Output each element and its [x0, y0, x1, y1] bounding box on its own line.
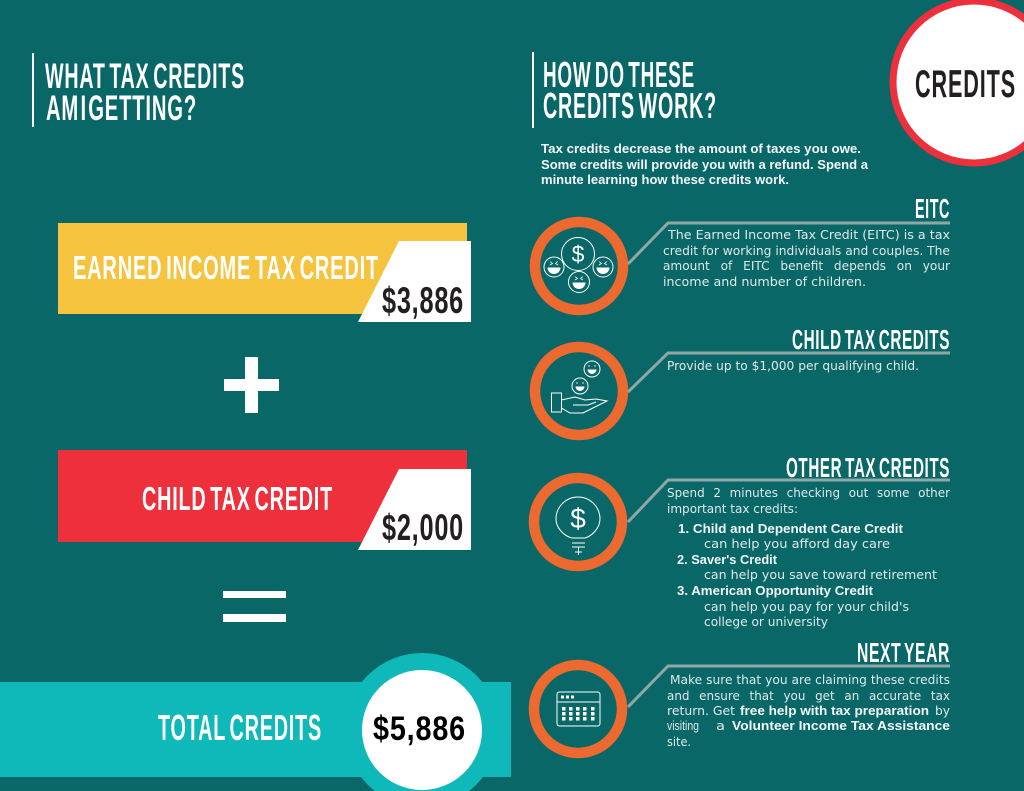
panel: total credits: TOTAL CREDITS	[158, 707, 322, 748]
panel: earned income tax credit: EARNED INCOME TAX CREDIT	[73, 250, 379, 287]
panel: total credits	[0, 653, 511, 791]
connector	[628, 353, 950, 392]
heading: how do these credits work	[532, 52, 717, 128]
body text: a	[716, 719, 725, 733]
body text	[667, 486, 951, 629]
body text: by	[935, 704, 950, 718]
panel: earned income tax credit	[58, 223, 471, 322]
heading: what tax credits am I getting: AM I GETTING?	[46, 89, 197, 128]
icon: light bulb with dollar	[534, 478, 622, 566]
panel: next year	[534, 637, 950, 753]
body text: and ensure that you get an accurate tax	[667, 689, 950, 703]
intro text: Some credits will provide you with a refund. Spend a	[541, 157, 869, 172]
heading: how do these credits work: CREDITS WORK?	[543, 85, 717, 126]
body text: site.	[667, 735, 691, 749]
icon: coin with smiling faces: $	[572, 241, 585, 267]
body text: college or university	[704, 615, 828, 629]
icon: plus sign	[224, 357, 279, 413]
intro text	[541, 141, 869, 187]
icon: equals sign	[223, 591, 286, 622]
connector	[628, 223, 950, 264]
icon: calendar	[534, 665, 622, 753]
intro text: minute learning how these credits work.	[541, 172, 789, 187]
body text: 2. Saver's Credit	[677, 552, 778, 567]
body text: visiting	[667, 718, 699, 733]
connector	[628, 666, 950, 707]
body text: return. Get	[667, 704, 735, 718]
body text: credit for working individuals and couples. The	[663, 244, 950, 258]
badge: credits	[893, 1, 1024, 163]
icon: coin with smiling faces	[535, 222, 623, 310]
intro text: Tax credits decrease the amount of taxes you owe.	[541, 141, 861, 156]
body text: Volunteer Income Tax Assistance	[732, 718, 950, 733]
section title: EITC	[915, 193, 950, 224]
heading: what tax credits am I getting: WHAT TAX CREDITS	[45, 57, 245, 96]
panel: child tax credit: CHILD TAX CREDIT	[142, 481, 333, 518]
body text: can help you pay for your child's	[704, 600, 909, 614]
body text: free help with tax preparation	[740, 703, 929, 718]
body text: Make sure that you are claiming these credits	[670, 673, 950, 687]
body text: important tax credits:	[667, 502, 798, 516]
heading: what tax credits am I getting	[32, 53, 245, 128]
body text: 3. American Opportunity Credit	[677, 583, 874, 598]
body text: amount of EITC benefit depends on your	[663, 259, 951, 273]
heading: how do these credits work: HOW DO THESE	[543, 54, 695, 95]
body text: Spend 2 minutes checking out some other	[667, 486, 951, 500]
panel: child tax credit: $2,000	[382, 507, 464, 548]
panel: total credits: $5,886	[373, 710, 466, 748]
connector	[628, 480, 950, 522]
body text: income and number of children.	[663, 275, 866, 289]
body text: can help you save toward retirement	[704, 568, 937, 582]
body text	[667, 673, 950, 749]
icon: light bulb with dollar: $	[570, 503, 586, 534]
body text: Provide up to $1,000 per qualifying child.	[667, 359, 919, 373]
body text: 1. Child and Dependent Care Credit	[678, 521, 904, 536]
icon: hand with faces	[535, 347, 623, 435]
body text	[663, 228, 951, 289]
panel: child tax credit	[58, 450, 471, 550]
panel: earned income tax credit: $3,886	[382, 280, 464, 321]
panel: child tax credits	[535, 324, 950, 435]
section title: NEXT YEAR	[857, 637, 950, 668]
body text: can help you afford day care	[704, 537, 890, 551]
panel: EITC	[535, 193, 951, 310]
panel: other tax credits	[534, 452, 951, 629]
body text: The Earned Income Tax Credit (EITC) is a tax	[667, 228, 950, 242]
